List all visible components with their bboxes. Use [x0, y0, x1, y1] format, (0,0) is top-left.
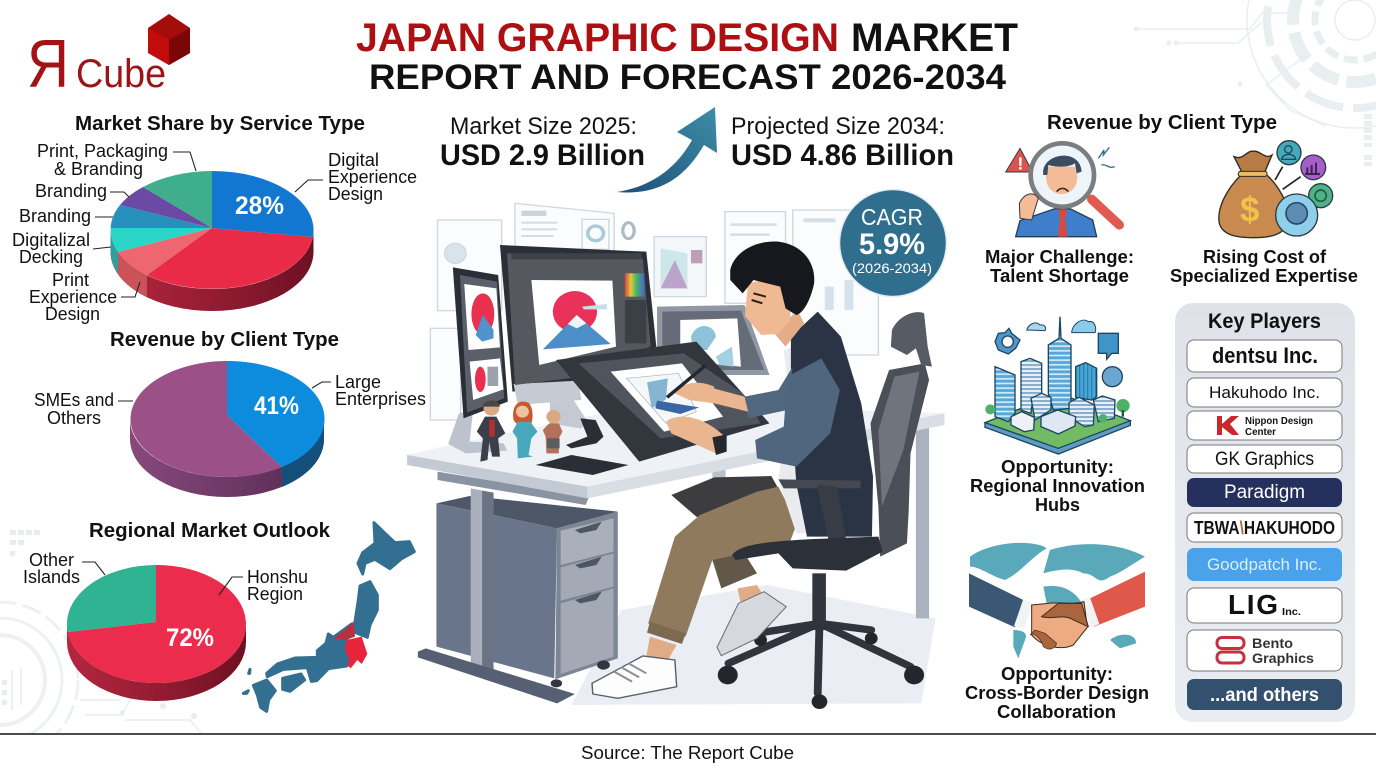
leader lines: client type: [118, 382, 331, 401]
card: Nippon Design Center: Nippon Design: [1245, 416, 1313, 427]
logo: RCube: Я: [27, 26, 69, 102]
card: Nippon Design Center: [1187, 411, 1342, 440]
labels: service type: Print: [52, 270, 89, 290]
badge: CAGR: CAGR: [861, 204, 923, 230]
floor shadow: [571, 585, 936, 705]
labels: service type: Digitalizal: [12, 230, 90, 250]
card: Bento Graphics: [1187, 630, 1342, 671]
panel: regional market outlook: [23, 520, 414, 711]
labels: regional: [23, 550, 308, 604]
labels: service type: Digital: [328, 150, 379, 170]
labels: service type: Design: [328, 184, 383, 204]
background papers: [430, 203, 878, 420]
labels: regional: Other: [29, 550, 74, 570]
icon: city: [985, 317, 1130, 454]
arrow: growth: [617, 107, 717, 192]
title: JAPAN GRAPHIC DESIGN: [356, 16, 839, 60]
card: TBWA Hakuhodo: [1187, 513, 1342, 542]
stat: projected size 2034: [731, 113, 954, 172]
stat: market size 2025: [440, 113, 645, 172]
panel: revenue by client type chart: [34, 329, 426, 497]
heading: revenue by client type: Revenue by Client Type: [110, 329, 339, 351]
card: Bento Graphics: Graphics: [1252, 650, 1314, 666]
heading: regional market outlook: Regional Market Outlook: [89, 520, 331, 542]
labels: service type: Experience: [29, 287, 117, 307]
card: LIG: Inc.: [1282, 607, 1301, 618]
icon: handshake over world map: [969, 543, 1145, 658]
labels: regional: Islands: [23, 567, 80, 587]
card: dentsu: [1187, 340, 1342, 372]
pie chart: service type: [110, 171, 314, 311]
chair: [718, 312, 932, 709]
heading: revenue by client type right: Revenue by Client Type: [1047, 112, 1277, 134]
figurines: [477, 400, 562, 462]
card: and others: ...and others: [1210, 685, 1319, 706]
badge: CAGR: [840, 190, 946, 296]
stat: market size 2025: USD 2.9 Billion: [440, 139, 645, 172]
labels: client type: Others: [47, 408, 101, 428]
text: rising cost: Rising Cost of: [1203, 247, 1327, 267]
text: regional innovation hubs: Regional Innovation: [970, 476, 1145, 496]
labels: service type: Branding: [19, 206, 91, 226]
pie chart: client type: 41%: [254, 392, 299, 420]
footer: source: Source: The Report Cube: [581, 743, 794, 763]
logo: RCube: [27, 14, 190, 102]
icon: talent shortage: [1006, 143, 1119, 237]
illustration: designer at desk: [407, 203, 944, 709]
heading: market share: Market Share by Service Type: [75, 113, 365, 135]
right monitor: [657, 305, 769, 375]
card: TBWA Hakuhodo: TBWA\HAKUHODO: [1194, 518, 1335, 538]
title: REPORT AND FORECAST 2026-2034: [369, 58, 1007, 97]
labels: service type: Print, Packaging: [37, 141, 168, 161]
background circuit pattern: bottom left: [0, 530, 230, 768]
badge: CAGR: (2026-2034): [852, 260, 932, 276]
labels: client type: [34, 372, 426, 428]
card: LIG: LIG: [1228, 589, 1278, 620]
text: talent shortage: [985, 247, 1134, 286]
logo: RCube: Cube: [76, 52, 166, 96]
text: cross-border collaboration: Collaboration: [997, 702, 1116, 722]
pie chart: regional: [67, 565, 246, 701]
pie chart: regional: 72%: [166, 624, 214, 652]
text: regional innovation hubs: Hubs: [1035, 495, 1080, 515]
text: cross-border collaboration: Cross-Border Design: [965, 683, 1149, 703]
text: rising cost: [1170, 247, 1358, 286]
small tablet: [536, 455, 628, 475]
text: cross-border collaboration: Opportunity:: [1001, 664, 1113, 684]
text: regional innovation hubs: Opportunity:: [1001, 457, 1114, 477]
block: rising cost: [1170, 141, 1358, 286]
card: Goodpatch: [1187, 548, 1342, 581]
labels: regional: Honshu: [247, 567, 308, 587]
left monitor: [448, 267, 508, 453]
card: and others: [1187, 679, 1342, 710]
block: cross-border collaboration: [965, 543, 1149, 722]
card: Hakuhodo: Hakuhodo Inc.: [1209, 383, 1320, 402]
block: regional innovation hubs: [970, 317, 1145, 515]
card: LIG: [1187, 588, 1342, 623]
card: Nippon Design Center: Center: [1245, 427, 1276, 438]
main monitor: [500, 245, 656, 428]
labels: service type: Experience: [328, 167, 417, 187]
text: talent shortage: Talent Shortage: [990, 266, 1129, 286]
card: GK Graphics: GK Graphics: [1215, 449, 1314, 470]
card: Hakuhodo: [1187, 378, 1342, 407]
icon: money bag: [1219, 141, 1333, 238]
text: talent shortage: Major Challenge:: [985, 247, 1134, 267]
map: Japan: [243, 523, 414, 711]
background circuit pattern: top right: [1134, 0, 1376, 166]
labels: service type: Design: [45, 304, 100, 324]
labels: service type: & Branding: [54, 159, 143, 179]
person: [592, 242, 883, 698]
labels: client type: Enterprises: [335, 389, 426, 409]
labels: service type: Decking: [19, 247, 83, 267]
card: Paradigm: Paradigm: [1224, 482, 1305, 503]
cabinet and desk leg: [418, 488, 618, 703]
card: Paradigm: [1187, 478, 1342, 507]
icon: money bag: $: [1240, 191, 1259, 230]
card: GK Graphics: [1187, 445, 1342, 473]
title: MARKET: [851, 16, 1018, 60]
card: dentsu: dentsu Inc.: [1212, 343, 1318, 368]
stat: projected size 2034: USD 4.86 Billion: [731, 139, 954, 172]
panel: key players: [1175, 303, 1355, 722]
badge: CAGR: 5.9%: [859, 228, 925, 261]
labels: service type: Branding: [35, 181, 107, 201]
stat: projected size 2034: Projected Size 2034:: [731, 113, 945, 140]
card: Goodpatch: Goodpatch Inc.: [1207, 555, 1322, 574]
leader lines: service type: [93, 152, 323, 297]
panel: market share by service type: [12, 113, 417, 324]
title: [356, 16, 1018, 97]
heading: key players: Key Players: [1208, 310, 1321, 333]
card: Bento Graphics: Bento: [1252, 635, 1293, 651]
text: rising cost: Specialized Expertise: [1170, 266, 1358, 286]
block: talent shortage: [985, 143, 1134, 286]
stat: market size 2025: Market Size 2025:: [450, 113, 637, 140]
labels: client type: SMEs and: [34, 390, 114, 410]
pie chart: client type: [130, 361, 325, 497]
drawing tablet: [556, 342, 769, 462]
pie chart: service type: 28%: [235, 192, 284, 220]
leader lines: regional: [82, 562, 243, 595]
icon: talent shortage: !: [1017, 153, 1023, 173]
labels: service type: [12, 141, 417, 324]
labels: regional: Region: [247, 584, 303, 604]
desk: [407, 403, 944, 618]
text: regional innovation hubs: [970, 457, 1145, 515]
text: cross-border collaboration: [965, 664, 1149, 722]
labels: client type: Large: [335, 372, 381, 392]
footer: source: [0, 733, 1376, 768]
